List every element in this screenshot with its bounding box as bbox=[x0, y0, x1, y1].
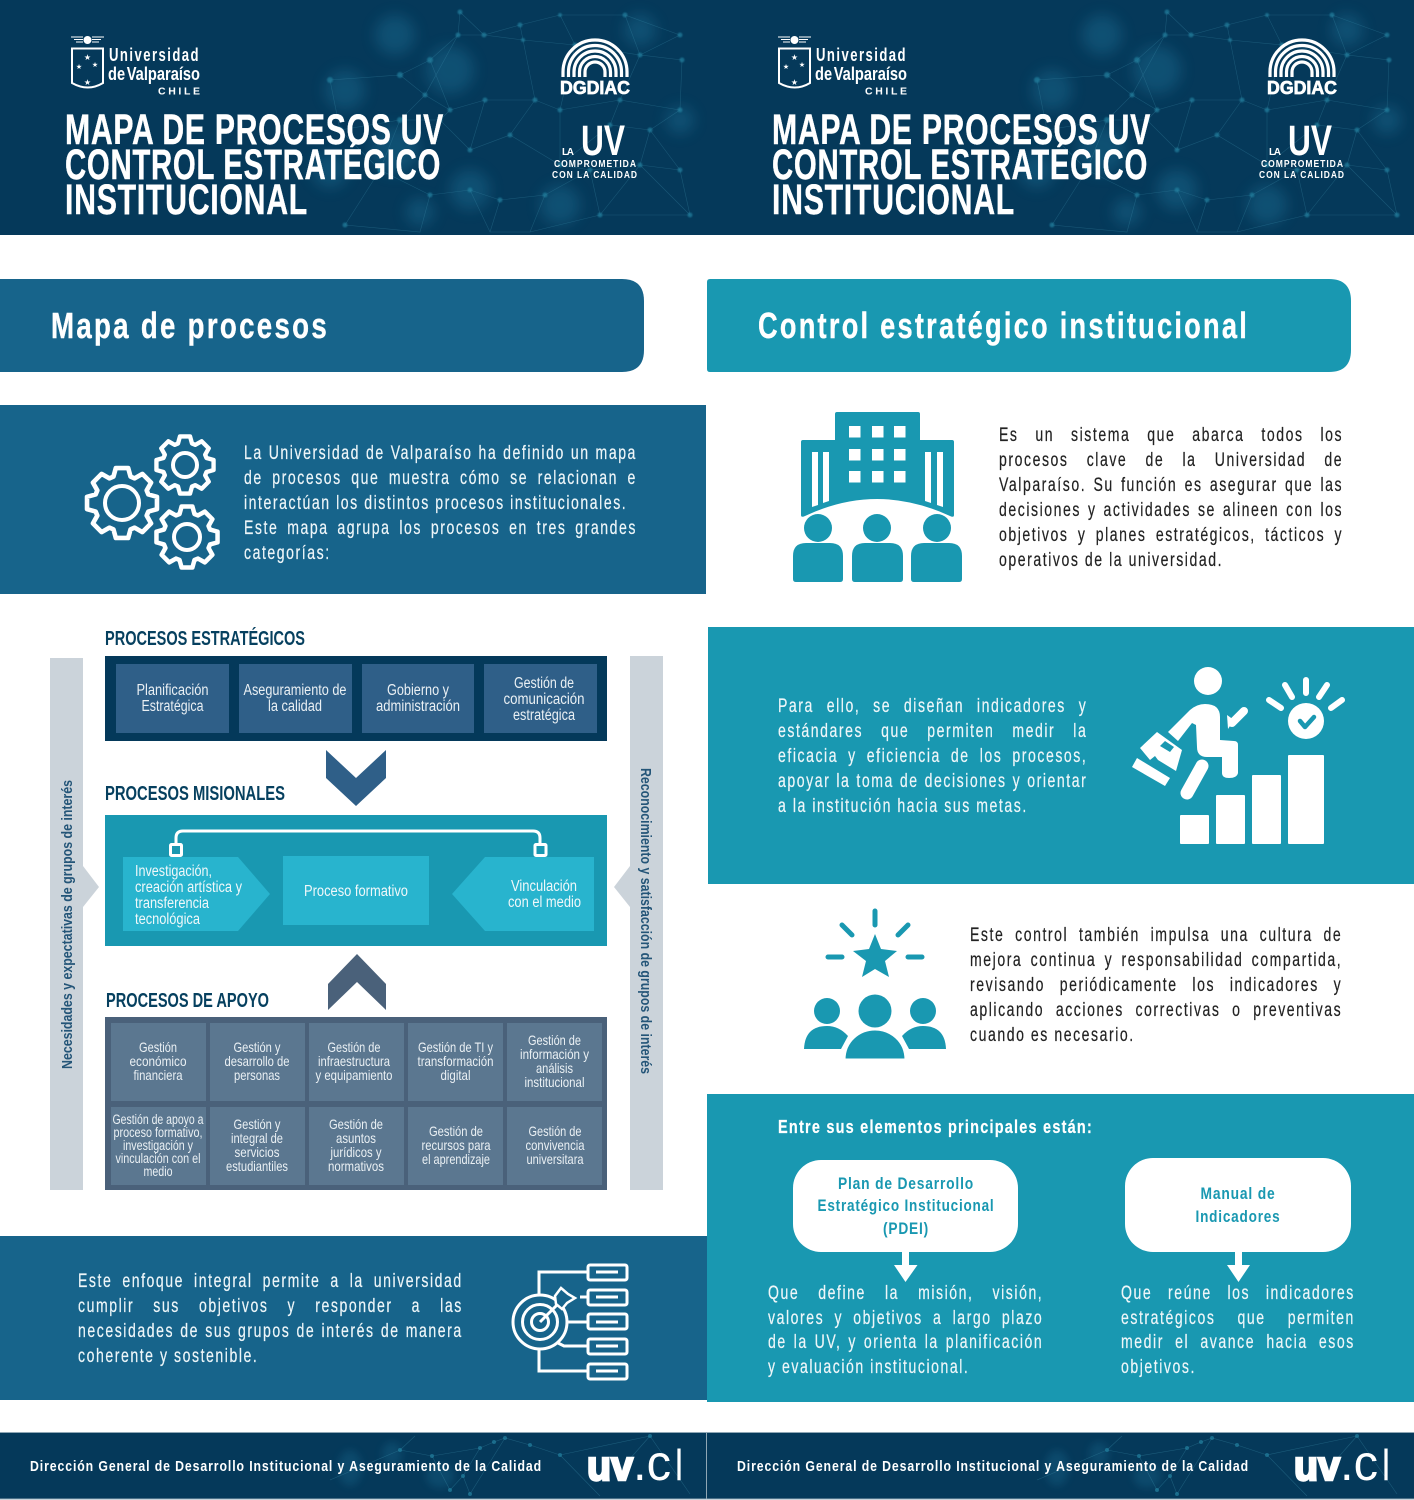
text: intro mapa de procesos: categorías: bbox=[244, 543, 330, 564]
text: descripción PDEI: Que define la misión, visión, bbox=[768, 1283, 1043, 1304]
panel: procesos de apoyo: Gestión de bbox=[528, 1123, 582, 1139]
header right bbox=[707, 0, 1414, 235]
text: cultura de mejora continua bbox=[970, 925, 1342, 1046]
panel: procesos de apoyo: Gestión de bbox=[329, 1116, 383, 1132]
logo: Universidad de Valparaíso right: ★ bbox=[799, 61, 805, 69]
box: PDEI: Estratégico Institucional bbox=[818, 1196, 994, 1215]
box: PDEI bbox=[793, 1160, 1018, 1252]
panel: procesos misionales: Vinculación bbox=[511, 878, 577, 895]
text: definición control estratégico: procesos clave de la Universidad de bbox=[998, 450, 1343, 471]
header left bbox=[0, 0, 707, 235]
panel: procesos de apoyo: servicios bbox=[234, 1144, 280, 1160]
logo: La UV comprometida right: UV bbox=[1288, 117, 1332, 165]
footer left: Dirección General de Desarrollo Institucional y Aseguramiento de la Calidad bbox=[30, 1458, 542, 1475]
panel: procesos de apoyo: vinculación con el bbox=[116, 1151, 200, 1166]
text: intro mapa de procesos: de procesos que muestra cómo se relacionan e bbox=[244, 468, 636, 489]
panel: procesos de apoyo: institucional bbox=[524, 1074, 584, 1090]
panel: procesos de apoyo: desarrollo de bbox=[224, 1053, 290, 1069]
panel: procesos de apoyo: financiera bbox=[134, 1067, 183, 1083]
panel: procesos misionales: transferencia bbox=[135, 895, 209, 912]
panel: procesos de apoyo: recursos para bbox=[422, 1137, 491, 1153]
box: Manual de Indicadores: Indicadores bbox=[1196, 1207, 1280, 1226]
text: intro mapa de procesos bbox=[244, 443, 636, 564]
logo: La UV comprometida: UV bbox=[581, 117, 625, 165]
icon: person climbing bars bbox=[1132, 667, 1342, 844]
logo: La UV comprometida: CON LA CALIDAD bbox=[552, 169, 638, 181]
icon: target with objectives bbox=[513, 1265, 627, 1379]
text: cultura de mejora continua: revisando periódicamente los indicadores y bbox=[970, 975, 1342, 996]
side bar: necesidades y expectativas bbox=[50, 658, 99, 1190]
panel: procesos estratégicos: comunicación bbox=[504, 691, 584, 708]
title bbox=[65, 106, 444, 224]
panel: procesos de apoyo: Gestión de bbox=[528, 1032, 581, 1048]
logo: uv.cl: .c bbox=[633, 1435, 671, 1491]
text: cultura de mejora continua: mejora continua y responsabilidad compartida, bbox=[970, 950, 1342, 971]
title: INSTITUCIONAL bbox=[65, 176, 308, 224]
text: descripción Manual de Indicadores bbox=[1121, 1283, 1355, 1378]
logo: uv.cl right: .c bbox=[1340, 1435, 1378, 1491]
text: intro mapa de procesos: interactúan los distintos procesos institucionales. bbox=[244, 493, 627, 514]
logo: Universidad de Valparaíso: ★ bbox=[84, 53, 91, 62]
logo: Universidad de Valparaíso right: de Valparaíso bbox=[815, 64, 907, 84]
panel: procesos de apoyo: personas bbox=[234, 1067, 280, 1083]
panel: procesos de apoyo: Gestión y bbox=[234, 1116, 280, 1132]
text: descripción PDEI: valores y objetivos a largo plazo bbox=[768, 1308, 1043, 1329]
heading: Procesos misionales: PROCESOS MISIONALES bbox=[105, 783, 285, 805]
logo: DGDIAC: DGDIAC bbox=[560, 77, 630, 98]
icon: building and people bbox=[793, 412, 962, 582]
panel: procesos de apoyo: información y bbox=[520, 1046, 589, 1062]
panel: procesos misionales: con el medio bbox=[508, 894, 581, 911]
panel: procesos de apoyo: y equipamiento bbox=[316, 1067, 393, 1083]
text: definición control estratégico: decisiones y actividades se alineen con los bbox=[998, 500, 1343, 521]
text: definición control estratégico: operativos de la universidad. bbox=[998, 550, 1223, 571]
panel: procesos de apoyo: el aprendizaje bbox=[422, 1151, 490, 1167]
text: enfoque integral: necesidades de sus grupos de interés de manera bbox=[78, 1321, 463, 1342]
logo: La UV comprometida right bbox=[1259, 117, 1345, 181]
logo: Universidad de Valparaíso: ★ bbox=[92, 61, 98, 69]
title: CONTROL ESTRATÉGICO bbox=[65, 141, 441, 189]
panel: procesos de apoyo: Gestión de bbox=[429, 1123, 483, 1139]
text: descripción Manual de Indicadores: Que reúne los indicadores bbox=[1121, 1283, 1355, 1304]
panel: procesos de apoyo: estudiantiles bbox=[226, 1158, 288, 1174]
title right bbox=[772, 106, 1151, 224]
logo: Universidad de Valparaíso right: CHILE bbox=[865, 86, 911, 98]
footer right bbox=[706, 1432, 1414, 1499]
text: indicadores y estándares bbox=[778, 696, 1087, 817]
side bar: reconocimiento y satisfacción: Reconocimiento y satisfacción de grupos de interés bbox=[637, 768, 654, 1074]
logo: Universidad de Valparaíso: ★ bbox=[84, 78, 91, 87]
text: cultura de mejora continua: Este control también impulsa una cultura de bbox=[970, 925, 1342, 946]
icon: gears bbox=[87, 436, 218, 568]
title right: CONTROL ESTRATÉGICO bbox=[772, 141, 1148, 189]
logo: Universidad de Valparaíso right bbox=[778, 36, 911, 98]
text: descripción Manual de Indicadores: estratégicos que permiten bbox=[1121, 1308, 1355, 1329]
panel: procesos de apoyo: normativos bbox=[328, 1158, 384, 1174]
heading band: Mapa de procesos: Mapa de procesos bbox=[51, 305, 329, 346]
panel: procesos de apoyo: Gestión bbox=[139, 1039, 177, 1055]
text: descripción PDEI: y evaluación institucional. bbox=[768, 1357, 969, 1378]
logo: Universidad de Valparaíso right: Universidad bbox=[816, 45, 907, 65]
logo: Universidad de Valparaíso right: ★ bbox=[783, 63, 789, 71]
logo: La UV comprometida right: COMPROMETIDA bbox=[1261, 158, 1344, 170]
panel: procesos estratégicos: Aseguramiento de bbox=[244, 682, 346, 699]
text: indicadores y estándares: estándares que permiten medir la bbox=[778, 721, 1087, 742]
logo: uv.cl right: uv bbox=[1294, 1442, 1341, 1489]
box: PDEI: (PDEI) bbox=[883, 1219, 929, 1238]
box: Manual de Indicadores: Manual de bbox=[1200, 1184, 1276, 1203]
text: indicadores y estándares: eficacia y eficiencia de los procesos, bbox=[778, 746, 1087, 767]
logo: Universidad de Valparaíso: ★ bbox=[76, 63, 82, 71]
footer left bbox=[0, 1432, 707, 1499]
panel: procesos misionales: Investigación, bbox=[135, 863, 212, 880]
panel: elementos principales: Entre sus elementos principales están: bbox=[778, 1117, 1093, 1137]
logo: Universidad de Valparaíso: Universidad bbox=[109, 45, 200, 65]
panel: procesos de apoyo: económico bbox=[130, 1053, 187, 1069]
panel: procesos estratégicos bbox=[105, 656, 607, 741]
text: intro mapa de procesos: Este mapa agrupa los procesos en tres grandes bbox=[244, 518, 636, 539]
text: enfoque integral: coherente y sostenible. bbox=[78, 1346, 258, 1367]
logo: uv.cl right bbox=[1294, 1435, 1390, 1491]
panel: procesos de apoyo: análisis bbox=[536, 1060, 573, 1076]
logo: La UV comprometida: COMPROMETIDA bbox=[554, 158, 637, 170]
box: Manual de Indicadores bbox=[1125, 1158, 1351, 1252]
logo: Universidad de Valparaíso: de Valparaíso bbox=[108, 64, 200, 84]
panel: procesos de apoyo: medio bbox=[144, 1164, 172, 1179]
heading: Procesos estratégicos: PROCESOS ESTRATÉGICOS bbox=[105, 627, 305, 650]
text: descripción PDEI: de la UV, y orienta la planificación bbox=[768, 1332, 1043, 1353]
text: indicadores y estándares: apoyar la toma de decisiones y orientar bbox=[778, 771, 1087, 792]
title right: INSTITUCIONAL bbox=[772, 176, 1015, 224]
heading band: Mapa de procesos bbox=[0, 279, 644, 372]
logo: Universidad de Valparaíso right: ★ bbox=[791, 53, 798, 62]
panel: procesos de apoyo: infraestructura bbox=[318, 1053, 390, 1069]
text: definición control estratégico: Valparaíso. Su función es asegurar que las bbox=[998, 475, 1343, 496]
panel: procesos de apoyo: jurídicos y bbox=[330, 1144, 382, 1160]
arrow: PDEI bbox=[894, 1252, 918, 1282]
panel: procesos de apoyo: digital bbox=[440, 1067, 470, 1083]
panel: closing background bbox=[0, 1236, 707, 1400]
panel: procesos de apoyo: Gestión de apoyo a bbox=[112, 1112, 204, 1127]
logo: Universidad de Valparaíso bbox=[71, 36, 204, 98]
panel: procesos estratégicos: Estratégica bbox=[142, 698, 204, 715]
logo: DGDIAC bbox=[560, 40, 630, 98]
arrow: Manual bbox=[1227, 1252, 1250, 1282]
box: PDEI: Plan de Desarrollo bbox=[838, 1174, 974, 1193]
text: indicadores y estándares: Para ello, se diseñan indicadores y bbox=[778, 696, 1087, 717]
panel: indicadores background bbox=[708, 627, 1414, 884]
footer right: Dirección General de Desarrollo Institucional y Aseguramiento de la Calidad bbox=[737, 1458, 1249, 1475]
side bar: necesidades y expectativas: Necesidades y expectativas de grupos de interés bbox=[59, 780, 76, 1069]
panel: procesos estratégicos: Gobierno y bbox=[387, 682, 449, 699]
logo: La UV comprometida right: CON LA CALIDAD bbox=[1259, 169, 1345, 181]
panel: procesos estratégicos: estratégica bbox=[513, 707, 575, 724]
logo: Universidad de Valparaíso right: ★ bbox=[791, 78, 798, 87]
panel: elementos principales bbox=[707, 1094, 1414, 1402]
text: definición control estratégico bbox=[998, 425, 1343, 571]
logo: La UV comprometida bbox=[552, 117, 638, 181]
heading band: Control estratégico institucional: Control estratégico institucional bbox=[758, 305, 1249, 346]
side bar: reconocimiento y satisfacción bbox=[614, 656, 663, 1190]
logo: DGDIAC right bbox=[1267, 40, 1337, 98]
logo: uv.cl: l bbox=[675, 1441, 683, 1490]
logo: uv.cl: uv bbox=[587, 1442, 634, 1489]
panel: procesos estratégicos: Gestión de bbox=[514, 675, 574, 692]
panel: procesos misionales: tecnológica bbox=[135, 911, 200, 928]
text: enfoque integral bbox=[78, 1271, 463, 1367]
logo: uv.cl bbox=[587, 1435, 683, 1491]
panel: procesos misionales: Proceso formativo bbox=[304, 883, 408, 900]
text: enfoque integral: cumplir sus objetivos y responder a las bbox=[78, 1296, 463, 1317]
logo: Universidad de Valparaíso: CHILE bbox=[158, 86, 204, 98]
panel: procesos de apoyo: universitara bbox=[526, 1151, 584, 1167]
text: enfoque integral: Este enfoque integral permite a la universidad bbox=[78, 1271, 463, 1292]
title right: MAPA DE PROCESOS UV bbox=[772, 106, 1151, 154]
panel: procesos de apoyo bbox=[105, 1017, 607, 1190]
logo: La UV comprometida right: LA bbox=[1269, 147, 1281, 158]
text: cultura de mejora continua: aplicando acciones correctivas o preventivas bbox=[970, 1000, 1342, 1021]
panel: procesos estratégicos: administración bbox=[376, 698, 460, 715]
title: MAPA DE PROCESOS UV bbox=[65, 106, 444, 154]
panel: procesos de apoyo: investigación y bbox=[123, 1138, 193, 1153]
panel: procesos misionales: creación artística y bbox=[135, 879, 242, 896]
panel: procesos de apoyo: Gestión de TI y bbox=[418, 1039, 493, 1055]
text: intro mapa de procesos: La Universidad de Valparaíso ha definido un mapa bbox=[244, 443, 636, 464]
heading: Procesos de apoyo: PROCESOS DE APOYO bbox=[106, 990, 269, 1012]
panel: procesos de apoyo: proceso formativo, bbox=[114, 1125, 202, 1140]
panel: procesos estratégicos: Planificación bbox=[136, 682, 208, 699]
text: descripción Manual de Indicadores: objetivos. bbox=[1121, 1357, 1196, 1378]
panel: procesos de apoyo: transformación bbox=[418, 1053, 494, 1069]
arrow: chevron down bbox=[326, 750, 386, 806]
icon: star over people bbox=[804, 911, 946, 1060]
panel: procesos de apoyo: integral de bbox=[231, 1130, 283, 1146]
text: cultura de mejora continua: cuando es necesario. bbox=[970, 1025, 1135, 1046]
arrow: chevron up bbox=[328, 954, 386, 1010]
heading band: Control estratégico institucional bbox=[707, 279, 1351, 372]
logo: uv.cl right: l bbox=[1382, 1441, 1390, 1490]
text: descripción Manual de Indicadores: medir el avance hacia esos bbox=[1121, 1332, 1355, 1353]
panel: procesos de apoyo: asuntos bbox=[336, 1130, 376, 1146]
panel: procesos de apoyo: Gestión y bbox=[234, 1039, 280, 1055]
logo: DGDIAC right: DGDIAC bbox=[1267, 77, 1337, 98]
text: descripción PDEI bbox=[768, 1283, 1043, 1378]
panel: procesos estratégicos: la calidad bbox=[268, 698, 322, 715]
text: definición control estratégico: Es un sistema que abarca todos los bbox=[998, 425, 1343, 446]
text: indicadores y estándares: a la institución hacia sus metas. bbox=[778, 796, 1028, 817]
panel: intro background bbox=[0, 405, 706, 594]
panel: procesos misionales bbox=[105, 815, 607, 946]
panel: procesos de apoyo: convivencia bbox=[526, 1137, 585, 1153]
panel: procesos de apoyo: Gestión de bbox=[328, 1039, 381, 1055]
logo: La UV comprometida: LA bbox=[562, 147, 574, 158]
text: definición control estratégico: objetivos y planes estratégicos, tácticos y bbox=[998, 525, 1343, 546]
